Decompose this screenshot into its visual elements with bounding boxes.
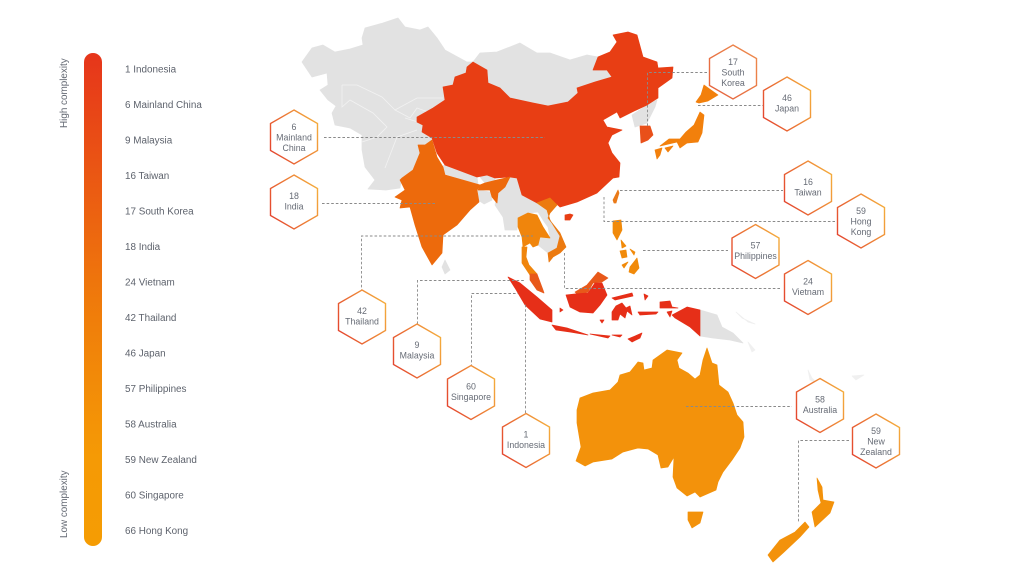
- map: Vietnam: [537, 198, 566, 262]
- callout: Vietnam: [784, 260, 832, 314]
- leader lines: [322, 72, 849, 523]
- callout: Thailand: Thailand: [345, 316, 379, 326]
- callout: Hong Kong: 59: [856, 206, 866, 216]
- callout: Malaysia: 9: [415, 340, 420, 350]
- callout: Australia: [796, 378, 844, 432]
- map: central asia borders: [342, 85, 443, 168]
- callout: Taiwan: 16: [803, 177, 813, 187]
- callout: Malaysia: [394, 324, 440, 378]
- callout: Mainland China: [270, 110, 318, 164]
- map: Thailand: [518, 213, 550, 247]
- legend country ranking list: 58 Australia: [125, 420, 177, 430]
- legend country ranking list: 60 Singapore: [125, 490, 184, 502]
- callout: Japan: [764, 77, 810, 131]
- map: Australia: [576, 348, 744, 497]
- callout: South Korea: South: [722, 68, 745, 78]
- map: Taiwan: [613, 190, 619, 203]
- callout: Hong Kong: [838, 194, 884, 248]
- legend country ranking list: 6 Mainland China: [125, 100, 202, 111]
- callout: Philippines: 57: [751, 240, 760, 250]
- callout: Mainland China: China: [282, 143, 306, 153]
- callout: South Korea: 17: [728, 57, 738, 67]
- callout: South Korea: Korea: [721, 78, 745, 88]
- map: India: [395, 140, 510, 265]
- map: New Zealand: [768, 478, 834, 562]
- callout: Hong Kong: Kong: [851, 227, 871, 237]
- callout: New Zealand: New: [867, 436, 885, 446]
- callout: Vietnam: 24: [803, 276, 813, 286]
- callout: Indonesia: [502, 414, 550, 468]
- callout: New Zealand: 59: [871, 426, 881, 436]
- legend country ranking list: 9 Malaysia: [125, 136, 173, 146]
- callout: South Korea: [710, 45, 756, 99]
- callout: Malaysia: Malaysia: [400, 350, 434, 360]
- callout: Mainland China: 6: [292, 122, 297, 132]
- callout: Indonesia: Indonesia: [507, 440, 545, 450]
- callout: India: 18: [289, 191, 299, 201]
- map: South Korea: [640, 126, 653, 143]
- callout: India: India: [284, 202, 304, 212]
- callout: India: [270, 175, 318, 229]
- callout: Hong Kong: Hong: [850, 216, 872, 226]
- callout: New Zealand: Zealand: [860, 447, 892, 457]
- legend country ranking list: 17 South Korea: [125, 206, 194, 218]
- legend country ranking list: 59 New Zealand: [125, 455, 197, 466]
- legend axis label: low complexity: Low complexity: [59, 470, 70, 538]
- callout: Thailand: [338, 290, 386, 344]
- map: Philippines: [613, 220, 639, 274]
- legend country ranking list: 16 Taiwan: [125, 171, 169, 182]
- callout: Philippines: Philippines: [734, 251, 777, 261]
- callout: Vietnam: Vietnam: [792, 287, 824, 297]
- legend country ranking list: 24 Vietnam: [125, 278, 175, 288]
- callout: Indonesia: 1: [524, 430, 529, 440]
- legend country ranking list: 57 Philippines: [125, 384, 187, 395]
- map: Japan: [655, 85, 718, 159]
- callout: Japan: Japan: [775, 104, 799, 114]
- callout: Australia: Australia: [803, 405, 837, 415]
- legend country ranking list: 46 Japan: [125, 348, 166, 360]
- legend country ranking list: 1 Indonesia: [125, 64, 177, 76]
- map: Tasmania: [688, 512, 703, 528]
- legend country ranking list: 18 India: [125, 242, 161, 253]
- callout: Singapore: 60: [466, 382, 476, 392]
- legend country ranking list: 66 Hong Kong: [125, 526, 188, 537]
- callout: Thailand: 42: [357, 306, 367, 316]
- map: grey non-ranked countries: [302, 18, 864, 384]
- map: China: [417, 32, 673, 220]
- legend country ranking list: [125, 64, 202, 537]
- map: Malaysia: [530, 272, 608, 295]
- callout: Philippines: [732, 224, 779, 278]
- callout: Taiwan: [784, 161, 832, 215]
- legend gradient bar: [84, 53, 102, 546]
- callout: Singapore: Singapore: [451, 392, 491, 402]
- callout: New Zealand: [852, 414, 900, 468]
- map: Indonesia: [508, 277, 700, 342]
- callout: Taiwan: Taiwan: [794, 188, 822, 198]
- callout: Singapore: [448, 366, 494, 420]
- legend country ranking list: 42 Thailand: [125, 313, 176, 324]
- map: Thailand peninsula: [522, 247, 537, 275]
- legend axis label: high complexity: High complexity: [59, 58, 70, 128]
- callout: Australia: 58: [815, 394, 825, 404]
- callout: Mainland China: Mainland: [276, 132, 312, 142]
- callout: Japan: 46: [782, 93, 792, 103]
